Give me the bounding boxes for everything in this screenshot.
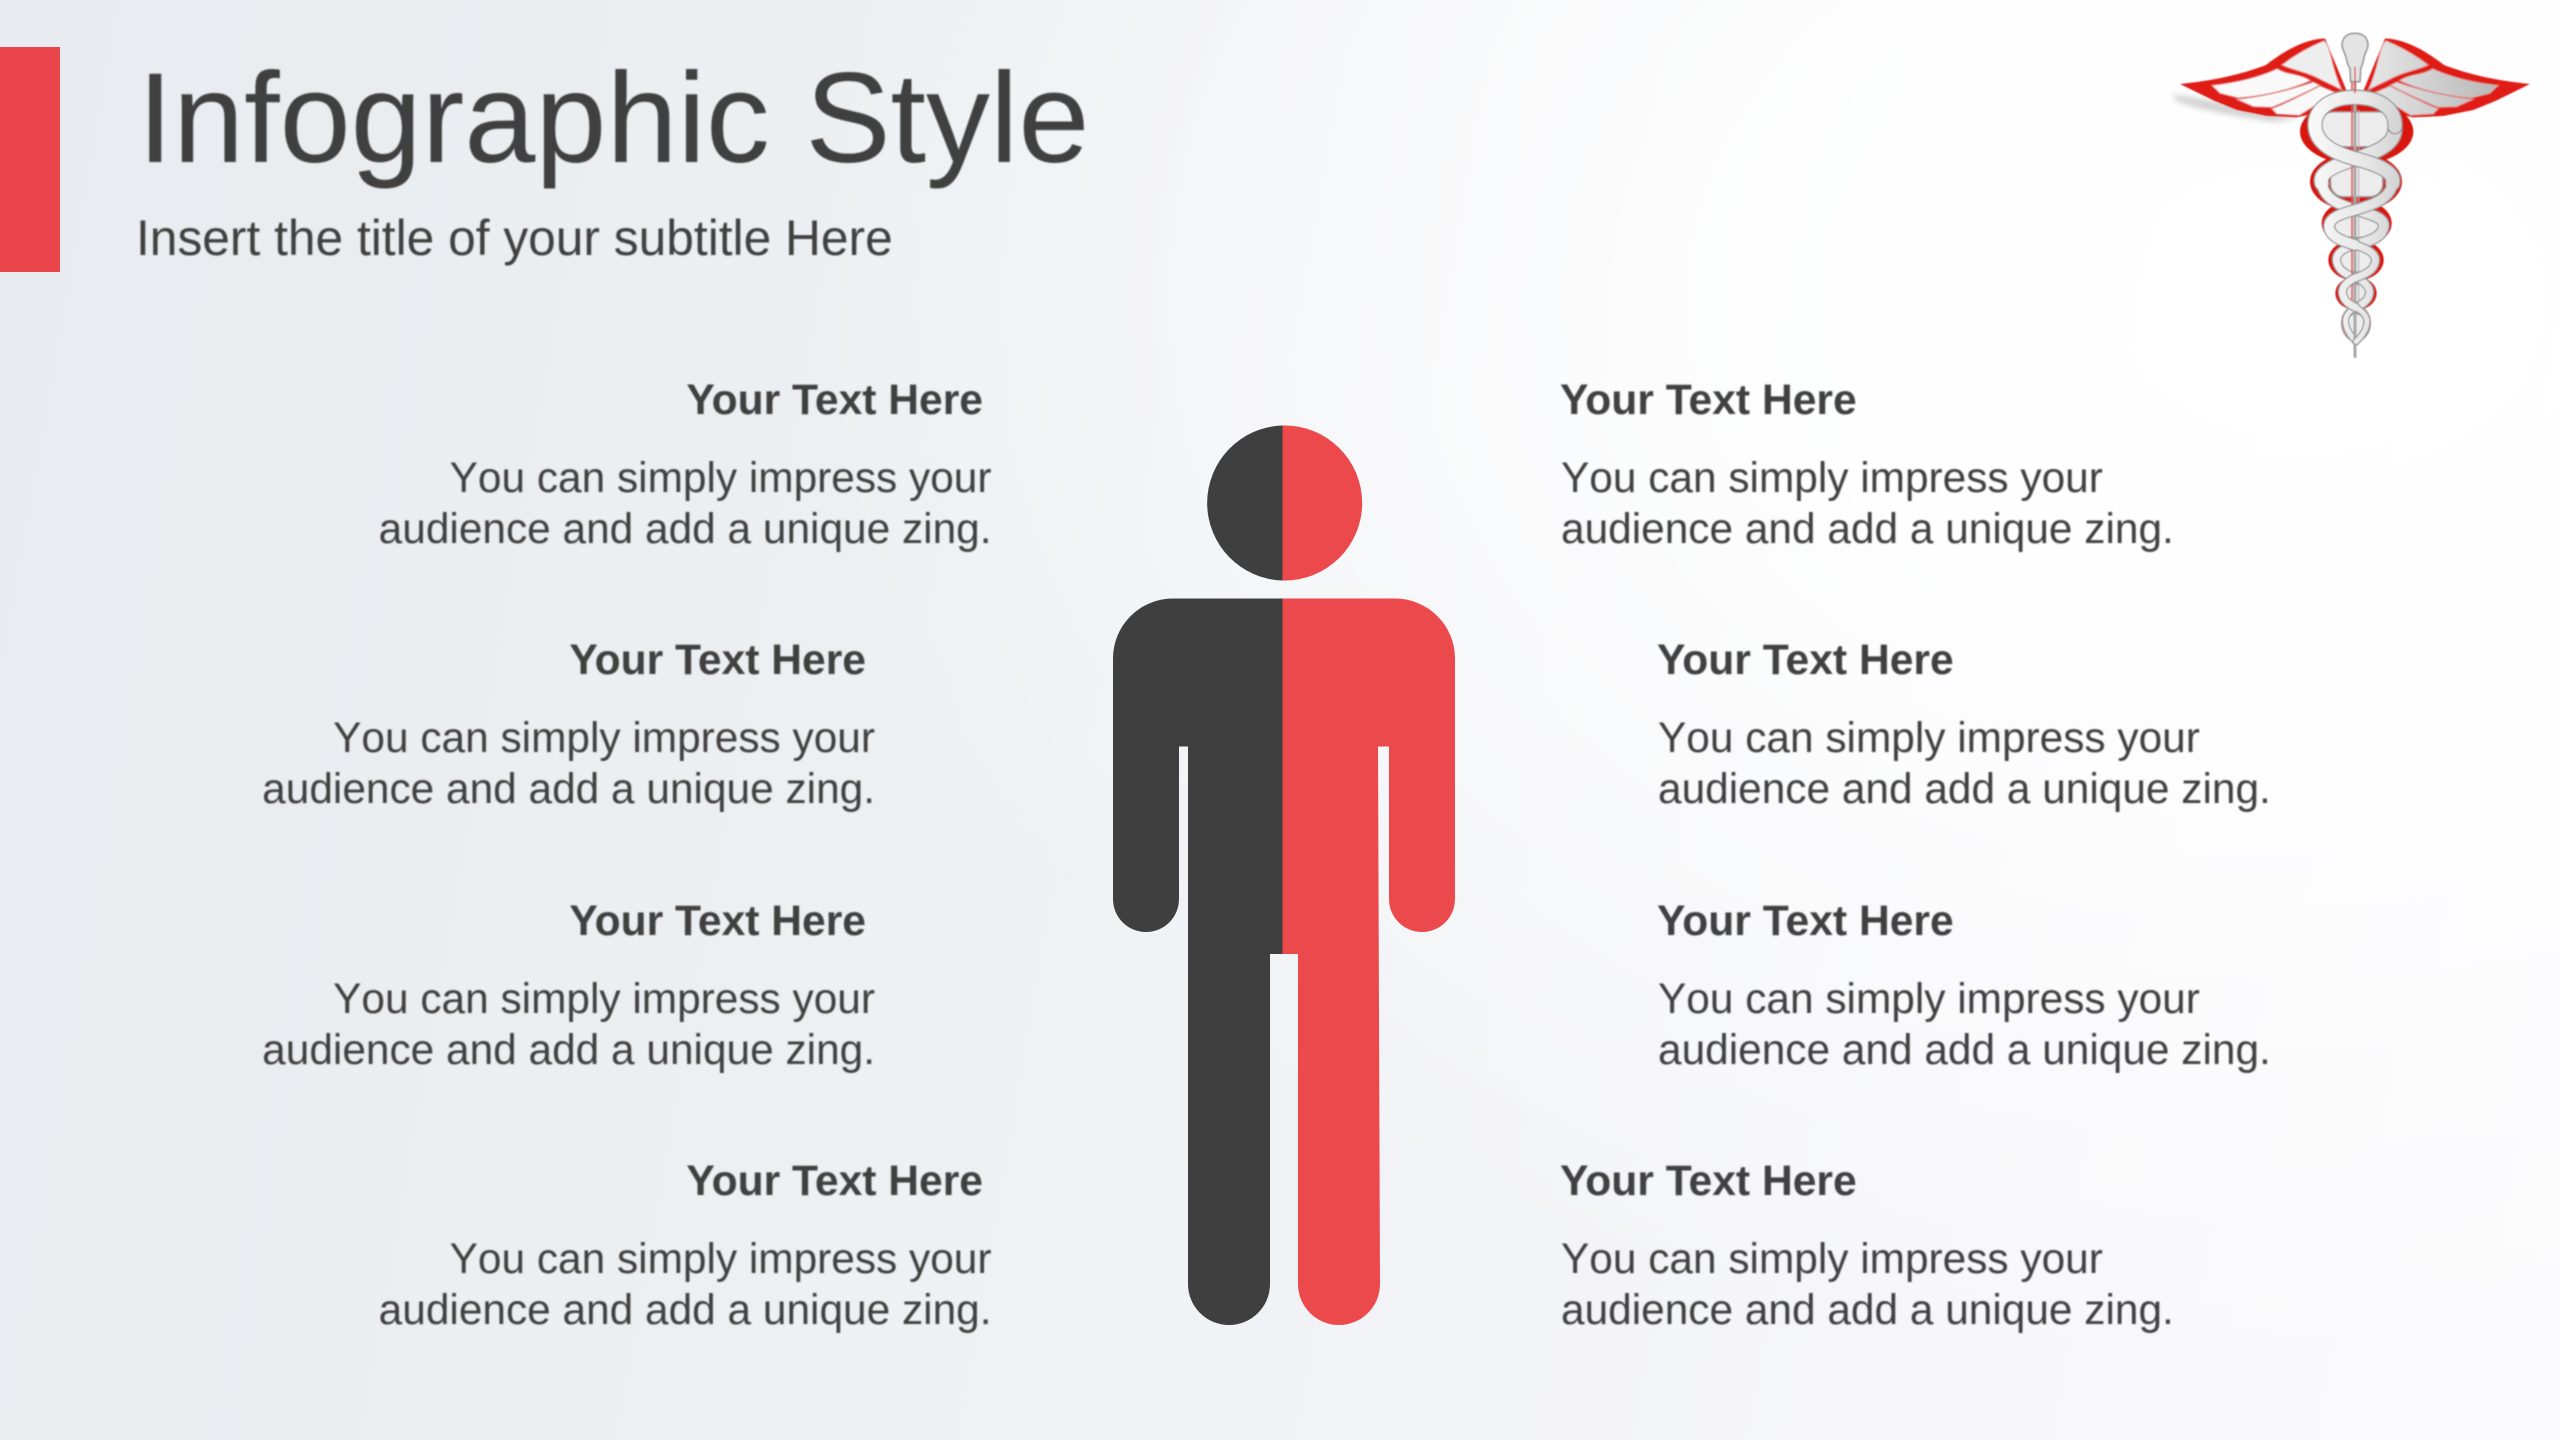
coil interiors (2322, 112, 2390, 337)
text block: right 4: Your Text Here (1560, 1157, 1857, 1205)
text block: left 4: audience and add a unique zing. (379, 1286, 992, 1333)
text block: left 1 (379, 376, 992, 552)
text block: right 4: audience and add a unique zing. (1561, 1286, 2174, 1333)
left wing (2180, 38, 2348, 117)
text block: right 2: audience and add a unique zing. (1658, 765, 2271, 812)
text block: right 1: Your Text Here (1560, 376, 1857, 424)
text block: right 3: audience and add a unique zing. (1658, 1026, 2271, 1073)
text block: right 3 (1657, 897, 2271, 1073)
text block: left 4: You can simply impress your (450, 1235, 992, 1282)
snake body front strand (2315, 97, 2395, 342)
accent bar (0, 47, 60, 272)
text block: right 2: Your Text Here (1657, 636, 1954, 684)
staff (2352, 50, 2359, 357)
text block: right 1 (1560, 376, 2174, 552)
text block: left 4 (379, 1157, 992, 1333)
icon: caduceus (2173, 33, 2530, 357)
text block: right 3: You can simply impress your (1658, 975, 2200, 1022)
text block: right 3: Your Text Here (1657, 897, 1954, 945)
text block: right 1: You can simply impress your (1561, 454, 2103, 501)
wing shadow (2173, 95, 2300, 122)
staff head (2342, 33, 2368, 93)
text block: left 3: Your Text Here (569, 897, 866, 945)
text block: right 1: audience and add a unique zing. (1561, 505, 2174, 552)
text block: left 3: audience and add a unique zing. (262, 1026, 875, 1073)
text block: right 2: You can simply impress your (1658, 714, 2200, 761)
right wing (2362, 38, 2530, 117)
text block: left 3: You can simply impress your (333, 975, 875, 1022)
text block: left 1: audience and add a unique zing. (379, 505, 992, 552)
text block: left 1: You can simply impress your (450, 454, 992, 501)
snake outline front strand (2315, 97, 2395, 342)
title: Infographic Style (138, 47, 1089, 190)
head red half (1282, 425, 1362, 580)
coil red backing (2300, 99, 2413, 310)
head dark half (1207, 426, 1282, 580)
text block: left 4: Your Text Here (686, 1157, 983, 1205)
text block: right 4 (1560, 1157, 2174, 1333)
person figure (1113, 425, 1455, 1325)
text block: left 1: Your Text Here (686, 376, 983, 424)
text block: right 2 (1657, 636, 2271, 812)
text block: left 2 (262, 636, 875, 812)
body dark half (1113, 598, 1282, 1325)
text block: left 2: Your Text Here (569, 636, 866, 684)
tail coil (2341, 305, 2371, 341)
snake outline (2321, 127, 2395, 342)
text block: left 2: You can simply impress your (333, 714, 875, 761)
text block: right 4: You can simply impress your (1561, 1235, 2103, 1282)
text block: left 3 (262, 897, 875, 1073)
text block: left 2: audience and add a unique zing. (262, 765, 875, 812)
body red half (1282, 598, 1455, 1325)
snake body rear strand (2321, 127, 2395, 342)
subtitle: Insert the title of your subtitle Here (136, 210, 893, 266)
